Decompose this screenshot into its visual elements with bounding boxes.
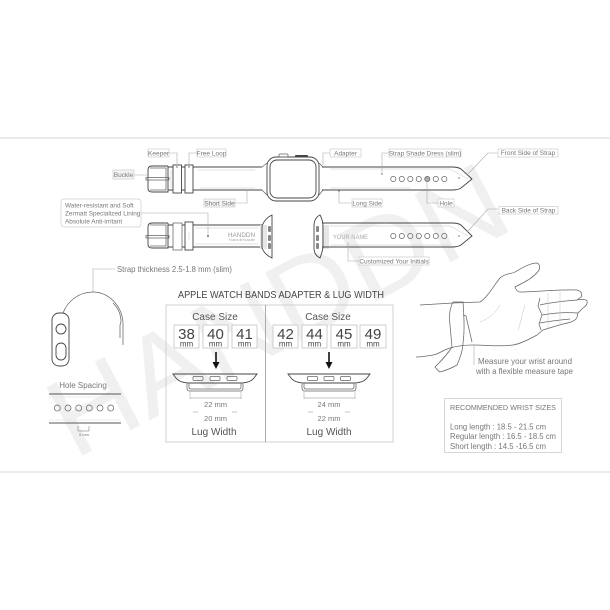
label: keeper: Keeper xyxy=(148,150,170,158)
logo xyxy=(228,233,255,242)
left column: Lug Width xyxy=(191,427,237,438)
left column: 41 xyxy=(236,326,253,343)
left column: 20 mm xyxy=(204,414,227,423)
panel: recommended wrist sizes: Short length : 14.5 -16.5 cm xyxy=(450,442,546,451)
strap side profile xyxy=(52,292,123,366)
arrow xyxy=(328,352,330,363)
front view watch with strap xyxy=(146,154,472,201)
right column: 49 xyxy=(365,326,381,343)
label: short side: Short Side xyxy=(204,200,235,208)
label: lining callout: Absolute Anti-irritant xyxy=(65,218,122,226)
right column xyxy=(273,312,386,438)
hatch left xyxy=(260,225,267,249)
front strap tip side xyxy=(322,167,472,190)
hole spacing: 5 mm xyxy=(79,432,90,437)
label: buckle: Buckle xyxy=(114,172,134,179)
right column: 42 xyxy=(277,326,294,343)
callout leaders xyxy=(93,153,498,292)
label: strap shade dress: Strap Shade Dress (slim) xyxy=(389,150,461,158)
label: customized initials: Customized Your Initials xyxy=(359,258,429,266)
label: hole xyxy=(438,199,454,208)
label: front side of strap: Front Side of Strap xyxy=(501,150,556,157)
right column: mm xyxy=(366,340,380,348)
label: adapter xyxy=(330,149,361,158)
panel: recommended wrist sizes: Regular length : 16.5 - 18.5 cm xyxy=(450,432,556,441)
left column xyxy=(173,312,257,438)
panel: recommended wrist sizes: RECOMMENDED WRIST SIZES xyxy=(450,403,556,412)
left column: Case Size xyxy=(192,312,238,323)
strap holes xyxy=(391,176,447,182)
adapter xyxy=(288,374,370,383)
label: free loop: Free Loop xyxy=(197,150,227,158)
watch case xyxy=(262,154,323,201)
free loop xyxy=(185,165,193,193)
left column: mm xyxy=(180,340,194,348)
label: long side: Long Side xyxy=(352,200,382,208)
right column: 24 mm xyxy=(318,400,340,409)
panel: recommended wrist sizes xyxy=(444,398,562,452)
measure instruction: with a flexible measure tape xyxy=(475,367,573,376)
right column: mm xyxy=(279,340,292,348)
label: adapter: Adapter xyxy=(334,150,358,158)
arrow xyxy=(215,352,217,363)
icon: hand with measuring tape xyxy=(416,263,587,372)
label: back side of strap: Back Side of Strap xyxy=(502,208,556,214)
right column: mm xyxy=(308,340,322,348)
buckle xyxy=(146,166,169,192)
logo: handmade xyxy=(229,238,255,242)
label: lining callout xyxy=(61,199,141,227)
initials: YOUR NAME xyxy=(333,234,369,241)
label: lining callout: Water-resistant and Soft xyxy=(65,202,134,210)
right column: Lug Width xyxy=(306,427,352,438)
watermark: HANDDN xyxy=(27,138,528,481)
left column: 22 mm xyxy=(204,400,227,409)
panel: adapter and lug width xyxy=(166,305,393,442)
chart title: APPLE WATCH BANDS ADAPTER & LUG WIDTH xyxy=(178,289,384,301)
label: hole: Hole xyxy=(439,200,453,208)
hole spacing: Hole Spacing xyxy=(59,381,107,390)
right column: 22 mm xyxy=(318,414,340,423)
left column: mm xyxy=(209,340,222,348)
wrist leader xyxy=(473,345,475,365)
logo: HANDDN xyxy=(228,233,255,239)
measure instruction: Measure your wrist around xyxy=(478,357,572,366)
right column: 45 xyxy=(336,326,352,343)
strap thickness label: Strap thickness 2.5-1.8 mm (slim) xyxy=(117,265,232,274)
back view right strap xyxy=(314,215,472,258)
adapter xyxy=(173,374,257,383)
panel: recommended wrist sizes: Long length : 18.5 - 21.5 cm xyxy=(450,422,546,432)
measure instruction xyxy=(475,357,573,376)
right column: Case Size xyxy=(305,312,351,323)
leader dots xyxy=(176,166,460,237)
left column: 40 xyxy=(207,326,224,343)
left column: mm xyxy=(238,340,252,348)
adapter left xyxy=(262,215,272,258)
keeper xyxy=(173,165,182,193)
back view left strap xyxy=(146,215,272,258)
right column: mm xyxy=(337,340,351,348)
label: lining callout: Zermatt Specialized Lining xyxy=(65,210,141,218)
right column: 44 xyxy=(306,326,323,343)
hole spacing xyxy=(49,381,121,437)
left column: 38 xyxy=(178,326,195,343)
